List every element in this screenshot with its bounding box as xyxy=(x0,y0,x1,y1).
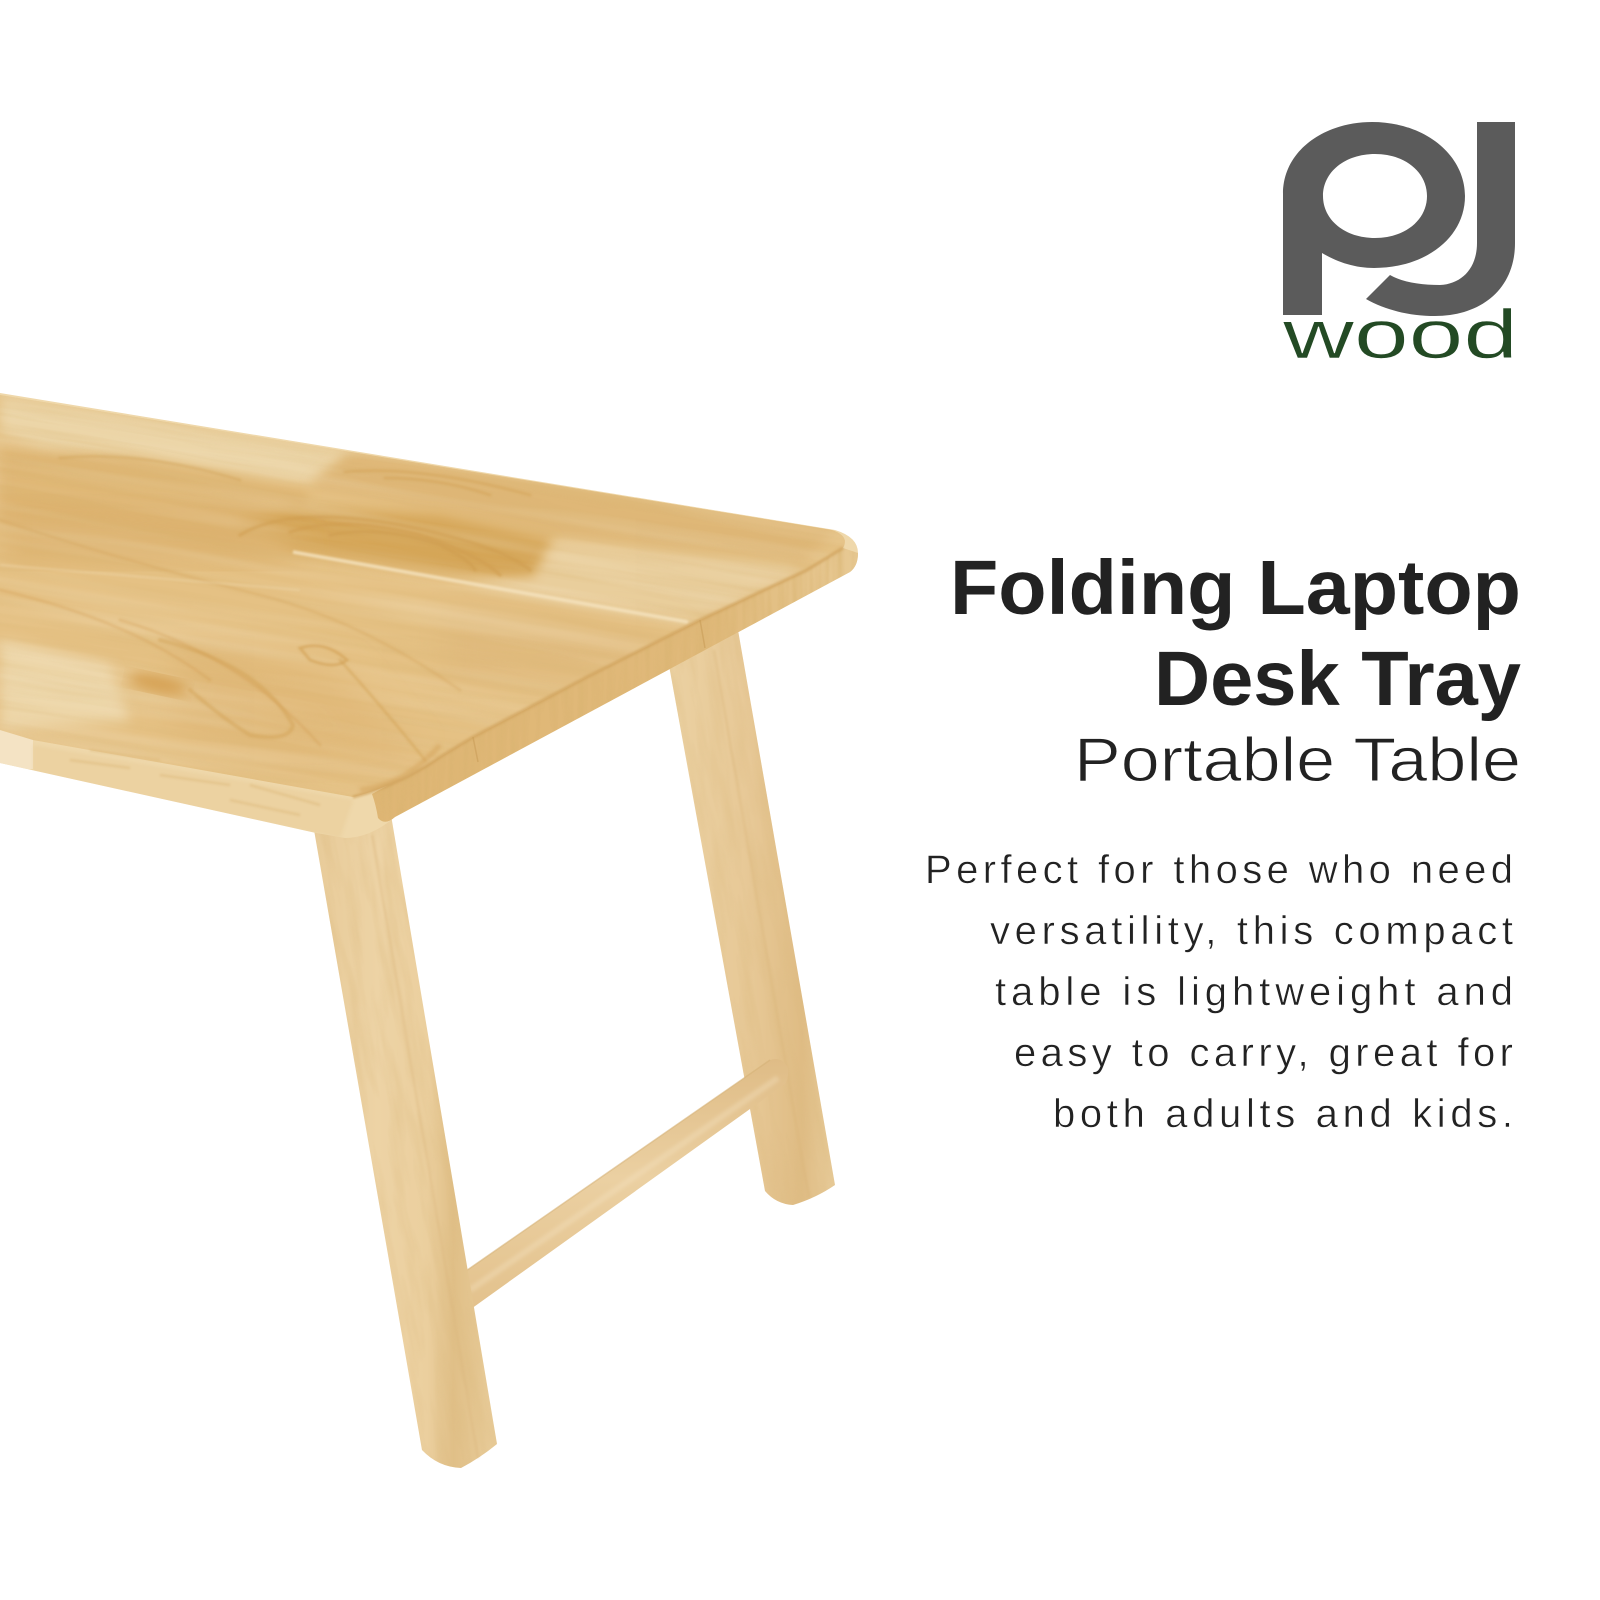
front edge end piece xyxy=(0,727,33,769)
table top xyxy=(0,393,858,838)
title line 2: Desk Tray xyxy=(1154,636,1521,722)
cross rail xyxy=(450,1059,788,1324)
description text xyxy=(925,848,1513,1136)
corner inner curve xyxy=(360,745,440,790)
dark knot xyxy=(127,669,189,699)
description line 3: table is lightweight and xyxy=(995,970,1513,1014)
title xyxy=(950,545,1521,722)
colour patches in the wood xyxy=(0,395,835,770)
description line 2: versatility, this compact xyxy=(990,909,1513,953)
description line 4: easy to carry, great for xyxy=(1014,1031,1513,1075)
description line 1: Perfect for those who need xyxy=(925,848,1513,892)
wood grain texture xyxy=(10,410,756,712)
front left leg xyxy=(314,820,497,1468)
table top edge xyxy=(0,393,858,838)
logo: PJ Wood xyxy=(1282,122,1518,373)
right edge strip xyxy=(372,548,858,822)
title line 1: Folding Laptop xyxy=(950,545,1521,631)
product photo: wooden folding table xyxy=(0,393,858,1468)
wood knots and rings xyxy=(0,456,530,760)
back right leg xyxy=(670,632,835,1205)
strip seams xyxy=(473,620,705,762)
surface rim shading xyxy=(353,548,843,797)
subtitle: Portable Table xyxy=(1074,726,1521,795)
front edge speckle xyxy=(33,745,353,838)
logo monogram pj xyxy=(1283,122,1515,316)
pale grain streaks xyxy=(0,415,843,775)
logo wordmark wood: wood xyxy=(1282,296,1518,373)
plank seam xyxy=(293,552,688,622)
table top surface xyxy=(0,395,845,797)
description line 5: both adults and kids. xyxy=(1053,1092,1513,1136)
